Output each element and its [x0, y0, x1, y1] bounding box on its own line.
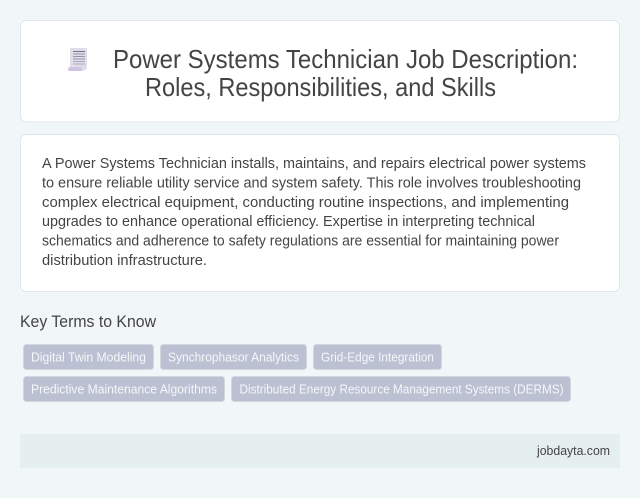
- heading: key terms: Key Terms to Know: [20, 313, 156, 331]
- chip: synchrophasor analytics: [160, 344, 306, 370]
- panel: description card: [20, 134, 620, 292]
- panel: title card: [20, 20, 620, 122]
- title: Roles, Responsibilities, and Skills: [145, 72, 496, 102]
- chip: predictive maintenance algorithms: Predictive Maintenance Algorithms: [31, 382, 217, 396]
- icon: document scroll: [68, 48, 87, 71]
- chip: DERMS: [232, 376, 570, 402]
- chip: predictive maintenance algorithms: [24, 376, 224, 402]
- text block: description: distribution infrastructure.: [42, 253, 207, 269]
- text block: description: A Power Systems Technician installs, maintains, and repairs electrical power systems: [42, 156, 586, 172]
- chip: DERMS: Distributed Energy Resource Management Systems (DERMS): [240, 382, 564, 396]
- text block: description: upgrades to enhance operational efficiency. Expertise in interpreting technical: [42, 214, 535, 230]
- footer: [20, 434, 620, 468]
- chip: digital twin modeling: Digital Twin Modeling: [31, 350, 146, 364]
- footer source: jobdayta.com: [536, 444, 610, 458]
- chip: digital twin modeling: [24, 344, 154, 370]
- text block: description: [42, 156, 586, 269]
- title: [113, 44, 578, 102]
- text block: description: to ensure reliable utility service and system safety. This role involves troubleshooting: [42, 175, 581, 191]
- text block: description: complex electrical equipment, conducting routine inspections, and implementing: [42, 195, 569, 211]
- chip: grid-edge integration: [314, 344, 442, 370]
- chip: synchrophasor analytics: Synchrophasor Analytics: [168, 350, 299, 364]
- text block: description: schematics and adherence to safety regulations are essential for maintaining power: [42, 234, 559, 250]
- title: Power Systems Technician Job Description:: [113, 44, 578, 74]
- chip: grid-edge integration: Grid-Edge Integration: [321, 350, 434, 364]
- chips: key terms: [24, 344, 570, 402]
